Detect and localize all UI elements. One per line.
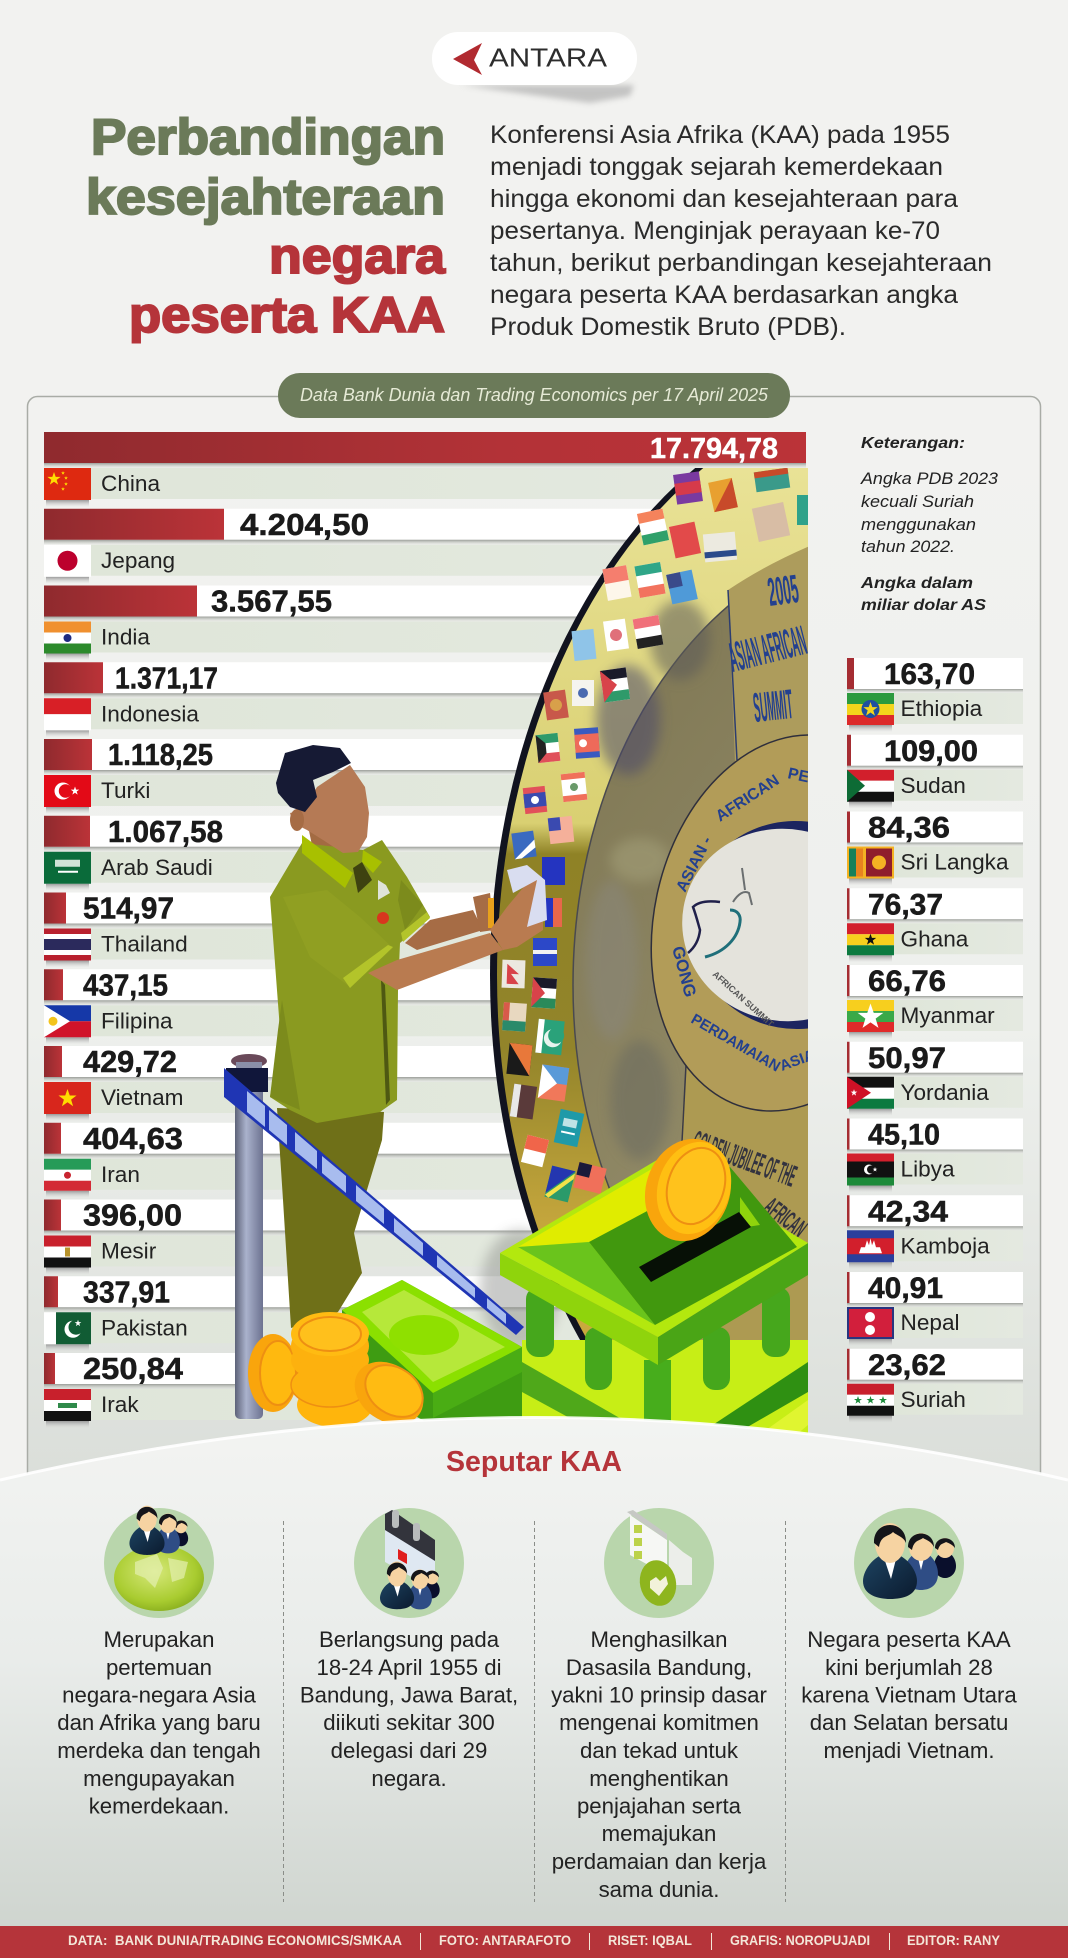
trousers — [277, 1108, 384, 1328]
row: Kamboja: Kamboja — [900, 1233, 990, 1258]
gong flags — [502, 468, 808, 1202]
row: Yordania: Yordania — [900, 1080, 989, 1105]
text: column 3 — [551, 1627, 768, 1902]
hair — [276, 745, 351, 812]
row: Jepang: Jepang — [101, 548, 175, 573]
text: column 3: penjajahan serta — [577, 1794, 742, 1818]
row: Myanmar: 66,76 — [868, 965, 946, 998]
footer credits: DATA: BANK DUNIA/TRADING ECONOMICS/SMKAA — [68, 1933, 402, 1948]
row: India: India — [101, 624, 150, 650]
row: Sri Langka: 84,36 — [868, 812, 950, 844]
text: column 1: dan Afrika yang baru — [57, 1710, 261, 1735]
title — [86, 109, 446, 343]
intro paragraph: menjadi tonggak sejarah kemerdekaan — [490, 153, 943, 181]
columns — [526, 1287, 554, 1357]
row: Filipina: 437,15 — [83, 967, 168, 1002]
text: column 4 — [801, 1627, 1017, 1763]
row: Suriah — [847, 1349, 1023, 1423]
falling coin — [632, 1128, 744, 1252]
text: column 1: kemerdekaan. — [89, 1794, 229, 1818]
gong lettering: ASIAN - — [673, 834, 716, 895]
neck — [308, 826, 364, 870]
gong lettering: 2005 — [765, 567, 801, 615]
gong lettering — [673, 574, 808, 1238]
footer credits: FOTO: ANTARAFOTO — [439, 1933, 571, 1948]
text: column 2: Bandung, Jawa Barat, — [300, 1682, 518, 1708]
legend note: tahun 2022. — [861, 538, 955, 556]
front hand — [490, 880, 543, 950]
legend note: menggunakan — [861, 516, 976, 534]
face — [290, 765, 369, 853]
row: Nepal: Nepal — [900, 1310, 960, 1335]
text: column 2 — [300, 1627, 518, 1791]
top summit panel — [728, 545, 812, 762]
legend note: Keterangan: — [861, 435, 965, 452]
badge and pin — [378, 880, 390, 900]
text: column 4: dan Selatan bersatu — [810, 1710, 1008, 1735]
row: China — [44, 432, 806, 507]
text: column 3: sama dunia. — [599, 1877, 719, 1902]
footer credits: GRAFIS: NOROPUJADI — [730, 1933, 870, 1948]
intro paragraph: pesertanya. Menginjak perayaan ke-70 — [490, 217, 940, 245]
text: column 3: perdamaian dan kerja — [552, 1849, 767, 1874]
text: column 3: memajukan — [602, 1821, 716, 1846]
text: column 2: 18-24 April 1955 di — [316, 1655, 502, 1680]
front forearm — [368, 933, 503, 990]
row: Myanmar: Myanmar — [900, 1003, 995, 1028]
row: Yordania — [847, 1042, 1023, 1116]
row: Turki — [44, 737, 806, 814]
text: column 3: mengenai komitmen — [559, 1710, 759, 1735]
panel: Seputar KAA — [0, 1418, 1068, 1958]
row: India: 3.567,55 — [211, 584, 332, 618]
text: column 1: mengupayakan — [83, 1766, 235, 1791]
roof slopes — [518, 1163, 730, 1247]
gong lettering: PERDAMAIAN — [688, 1011, 783, 1075]
footer credits: EDITOR: RANY — [907, 1933, 1000, 1948]
text: column 1: negara-negara Asia — [62, 1682, 256, 1708]
gong lettering: GOLDEN JUBILEE OF THE — [688, 1124, 801, 1193]
intro paragraph — [490, 121, 992, 341]
row: Libya: Libya — [900, 1156, 955, 1182]
row: Ethiopia: 163,70 — [884, 658, 975, 691]
text: column 2: negara. — [371, 1766, 447, 1791]
row: Iran: Iran — [101, 1162, 140, 1187]
row: Sudan: 109,00 — [884, 735, 978, 768]
row: Irak: Irak — [101, 1392, 139, 1417]
source pill — [278, 373, 790, 418]
row: Arab Saudi — [44, 814, 806, 891]
legend note: Angka dalam — [860, 575, 973, 592]
coin slot — [639, 1212, 751, 1282]
row: Irak — [44, 1351, 806, 1428]
icon: calendar and people — [354, 1508, 464, 1618]
row: Nepal: 40,91 — [868, 1272, 943, 1305]
panel: chart frame — [28, 396, 1040, 1536]
heading: Seputar KAA — [446, 1446, 622, 1478]
gong lettering: ASIAN AFRICAN — [724, 618, 811, 681]
intro paragraph: Konferensi Asia Afrika (KAA) pada 1955 — [490, 121, 950, 149]
gong lettering: SUMMIT — [751, 682, 795, 732]
row: Indonesia — [44, 660, 806, 737]
row: Jepang: 4.204,50 — [240, 507, 369, 542]
row: Arab Saudi: Arab Saudi — [101, 855, 213, 880]
text: column 4: kini berjumlah 28 — [825, 1655, 993, 1680]
row: Thailand: Thailand — [101, 932, 188, 956]
row: Mesir: 396,00 — [83, 1198, 182, 1232]
row: Indonesia: Indonesia — [101, 701, 199, 726]
row: Irak: 250,84 — [83, 1351, 184, 1386]
gong lettering: PEACE — [786, 765, 844, 793]
row: Vietnam: Vietnam — [101, 1085, 183, 1110]
intro paragraph: tahun, berikut perbandingan kesejahteraan — [490, 249, 992, 277]
collar — [302, 835, 353, 888]
title: peserta KAA — [129, 287, 445, 343]
text: column 3: dan tekad untuk — [580, 1738, 739, 1763]
row: Ghana: Ghana — [900, 926, 969, 951]
source pill: Data Bank Dunia dan Trading Economics per 17 April 2025 — [300, 384, 769, 405]
intro paragraph: Produk Domestik Bruto (PDB). — [490, 313, 846, 341]
row: Vietnam: 429,72 — [83, 1044, 177, 1079]
cloth — [507, 865, 547, 927]
row: Mesir: Mesir — [101, 1238, 157, 1264]
row: Filipina: Filipina — [101, 1008, 173, 1033]
row: China: China — [101, 471, 160, 496]
legend note — [860, 435, 999, 614]
text: column 3: menghentikan — [589, 1766, 729, 1791]
ring patina patches — [586, 600, 710, 1160]
dome — [724, 821, 808, 1029]
legend note: miliar dolar AS — [861, 597, 986, 614]
row: Vietnam — [44, 1044, 806, 1121]
row: Mesir — [44, 1198, 806, 1274]
row: Pakistan: Pakistan — [101, 1315, 188, 1340]
intro paragraph: hingga ekonomi dan kesejahteraan para — [490, 185, 958, 213]
row: China: 17.794,78 — [650, 433, 778, 465]
row: Libya: 45,10 — [868, 1118, 940, 1152]
row: Pakistan — [44, 1274, 806, 1351]
row: Sri Langka: Sri Langka — [900, 850, 1009, 874]
logo: ANTARA — [432, 32, 637, 103]
intro paragraph: negara peserta KAA berdasarkan angka — [490, 281, 958, 309]
row: Suriah: Suriah — [900, 1387, 966, 1412]
icon: checklist and badge — [604, 1508, 714, 1618]
row: Sudan — [847, 735, 1023, 809]
row: Kamboja — [847, 1195, 1023, 1269]
text: column 3: Dasasila Bandung, — [566, 1655, 752, 1680]
text: column 1: Merupakan — [103, 1627, 215, 1652]
text: column 4: menjadi Vietnam. — [823, 1738, 995, 1763]
logo: ANTARA: ANTARA — [489, 42, 608, 72]
gong lettering: ASIA — [778, 1046, 817, 1075]
row: Yordania: 50,97 — [868, 1042, 946, 1075]
text: column 4: karena Vietnam Utara — [801, 1682, 1017, 1708]
row: Pakistan: 337,91 — [83, 1274, 170, 1309]
text: column 1 — [57, 1627, 261, 1818]
icon: people on globe — [104, 1506, 214, 1618]
gong lettering: AFRICAN — [758, 1192, 812, 1243]
roof rim — [500, 1253, 658, 1365]
row: Sri Langka — [847, 812, 1023, 886]
text: column 3: yakni 10 prinsip dasar — [551, 1682, 768, 1708]
row: Turki: Turki — [101, 778, 150, 803]
row: Ghana: 76,37 — [868, 888, 943, 921]
row: Iran: 404,63 — [83, 1121, 183, 1156]
row: Myanmar — [847, 965, 1023, 1039]
row: India — [44, 584, 806, 660]
back arm — [405, 910, 483, 950]
title: kesejahteraan — [86, 169, 445, 225]
row: Thailand: 514,97 — [83, 890, 174, 926]
gong lettering: GONG — [668, 944, 700, 999]
row: Sudan: Sudan — [900, 773, 966, 798]
row: Kamboja: 42,34 — [868, 1195, 948, 1228]
text: column 1: merdeka dan tengah — [57, 1738, 261, 1763]
text: column 2: diikuti sekitar 300 — [323, 1710, 495, 1735]
bar chart: large economies — [44, 432, 806, 1428]
inner inscribed ring — [650, 734, 808, 1112]
bar chart: smaller economies — [847, 658, 1023, 1423]
row: Libya — [847, 1118, 1023, 1192]
text: column 1: pertemuan — [106, 1655, 212, 1680]
row: Ethiopia: Ethiopia — [900, 696, 983, 721]
row: Suriah: 23,62 — [868, 1349, 946, 1382]
sleeve cuffs — [343, 945, 393, 988]
base — [522, 1340, 808, 1440]
row: Filipina — [44, 967, 806, 1044]
legend note: kecuali Suriah — [861, 493, 974, 511]
shirt — [270, 840, 430, 1123]
footer credits: RISET: IQBAL — [608, 1933, 692, 1948]
illustration: gold coins — [248, 1312, 435, 1437]
row: Thailand — [44, 890, 806, 968]
front sleeve — [283, 890, 393, 987]
title: Perbandingan — [91, 109, 445, 165]
row: Indonesia: 1.371,17 — [115, 660, 218, 695]
lower jubilee panel — [682, 1068, 808, 1340]
title: negara — [269, 228, 446, 284]
gong lettering: AFRICAN SUMMIT — [711, 969, 776, 1029]
photo: rope stanchion — [224, 1054, 524, 1419]
legend note: Angka PDB 2023 — [860, 470, 999, 488]
gong lettering: AFRICAN — [713, 772, 783, 825]
row: Arab Saudi: 1.067,58 — [108, 814, 223, 849]
footer credits — [0, 1926, 1068, 1958]
photo: gong — [474, 468, 808, 1347]
icon: three delegates — [854, 1508, 964, 1618]
row: Iran — [44, 1121, 806, 1198]
text: column 2: Berlangsung pada — [319, 1627, 500, 1652]
row: Ghana — [847, 888, 1023, 962]
illustration: bank note stack — [342, 1280, 522, 1425]
row: Turki: 1.118,25 — [108, 737, 213, 772]
text: column 4: Negara peserta KAA — [807, 1627, 1011, 1652]
row: Ethiopia — [847, 658, 1023, 732]
row: Nepal — [847, 1272, 1023, 1346]
photo: man polishing the gong — [270, 745, 547, 1328]
illustration: green bank building — [500, 1128, 808, 1440]
text: column 2: delegasi dari 29 — [331, 1738, 487, 1763]
text: column 3: Menghasilkan — [591, 1627, 727, 1652]
row: Jepang — [44, 507, 806, 584]
